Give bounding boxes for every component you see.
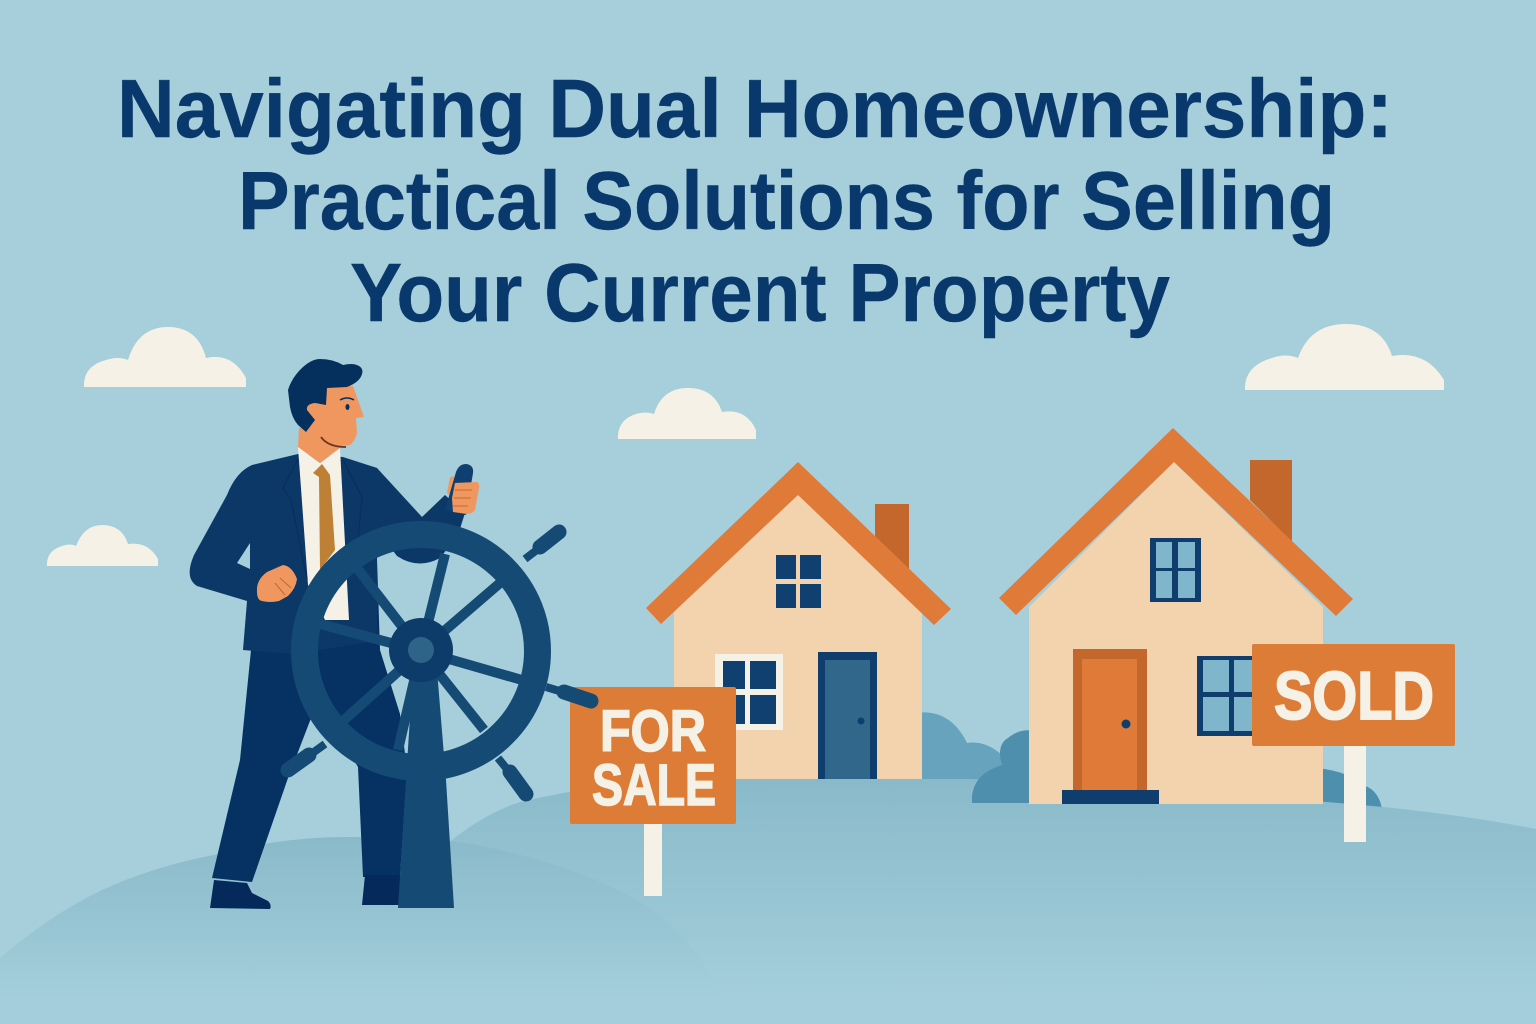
upper window bbox=[776, 555, 821, 608]
lapels bbox=[283, 459, 362, 579]
for sale sign bbox=[570, 687, 736, 896]
smile line bbox=[321, 437, 346, 447]
sold sign bbox=[1252, 644, 1455, 842]
cloud: lower left bbox=[47, 525, 158, 566]
bush behind first house bbox=[915, 712, 1020, 790]
thumb bbox=[447, 476, 458, 498]
hand on wheel bbox=[257, 565, 297, 602]
eye bbox=[346, 404, 350, 410]
title: Navigating Dual Homeownership: bbox=[117, 62, 1393, 155]
fingers bbox=[452, 482, 479, 514]
man in suit bbox=[190, 359, 465, 909]
shirt bbox=[298, 447, 349, 620]
hub cap bbox=[408, 637, 434, 663]
hair bbox=[288, 359, 362, 432]
palm bbox=[257, 565, 297, 602]
handle necks bbox=[307, 546, 566, 774]
hand on top handle bbox=[445, 464, 479, 515]
tie bbox=[313, 464, 335, 570]
door bbox=[1073, 649, 1147, 790]
sign board bbox=[1252, 644, 1455, 746]
upper window bbox=[1150, 538, 1201, 602]
finger lines bbox=[453, 490, 472, 506]
sign post bbox=[1344, 740, 1366, 842]
house: sold bbox=[999, 428, 1353, 804]
gap under arm bbox=[237, 543, 250, 569]
left foreground hill bbox=[0, 837, 740, 1024]
sign text: SALE bbox=[592, 753, 716, 818]
chimney bbox=[1250, 460, 1292, 542]
door step bbox=[1062, 790, 1159, 804]
ear bbox=[306, 403, 322, 419]
sign text: FOR bbox=[600, 699, 706, 764]
lower window bbox=[1197, 656, 1257, 736]
brow bbox=[340, 398, 354, 400]
pedestal bbox=[398, 670, 454, 908]
jacket bbox=[190, 454, 377, 654]
face bbox=[305, 386, 364, 447]
cloud: center bbox=[618, 388, 756, 439]
handle grips bbox=[288, 532, 591, 794]
title: Practical Solutions for Selling bbox=[238, 154, 1335, 247]
top handle bbox=[445, 464, 473, 515]
sign board bbox=[570, 687, 736, 824]
wall bbox=[1029, 462, 1323, 804]
left shoe bbox=[210, 880, 271, 909]
rim bbox=[304, 534, 538, 768]
house: for sale bbox=[646, 462, 951, 779]
trousers bbox=[212, 559, 407, 882]
right shoe bbox=[362, 875, 400, 905]
hub bbox=[389, 618, 453, 682]
ground hill bbox=[440, 779, 1536, 1024]
sign text bbox=[592, 699, 716, 818]
title: Your Current Property bbox=[350, 246, 1170, 339]
jacket sleeve to wheel bbox=[340, 457, 465, 564]
sign text: SOLD bbox=[1274, 658, 1434, 734]
neck bbox=[298, 428, 340, 463]
chimney bbox=[875, 504, 909, 570]
bush left of second house bbox=[972, 730, 1035, 803]
cloud: upper left bbox=[84, 327, 246, 387]
title bbox=[117, 62, 1393, 339]
roof bbox=[646, 462, 951, 625]
ship wheel bbox=[288, 532, 591, 908]
spokes bbox=[320, 554, 522, 750]
cloud: upper right bbox=[1245, 324, 1444, 390]
knuckle lines bbox=[275, 578, 291, 595]
sign post bbox=[644, 815, 662, 896]
bush right of second house bbox=[1318, 768, 1383, 815]
door bbox=[818, 652, 877, 779]
roof bbox=[999, 428, 1353, 616]
wall bbox=[674, 495, 922, 779]
lower window bbox=[715, 654, 783, 730]
